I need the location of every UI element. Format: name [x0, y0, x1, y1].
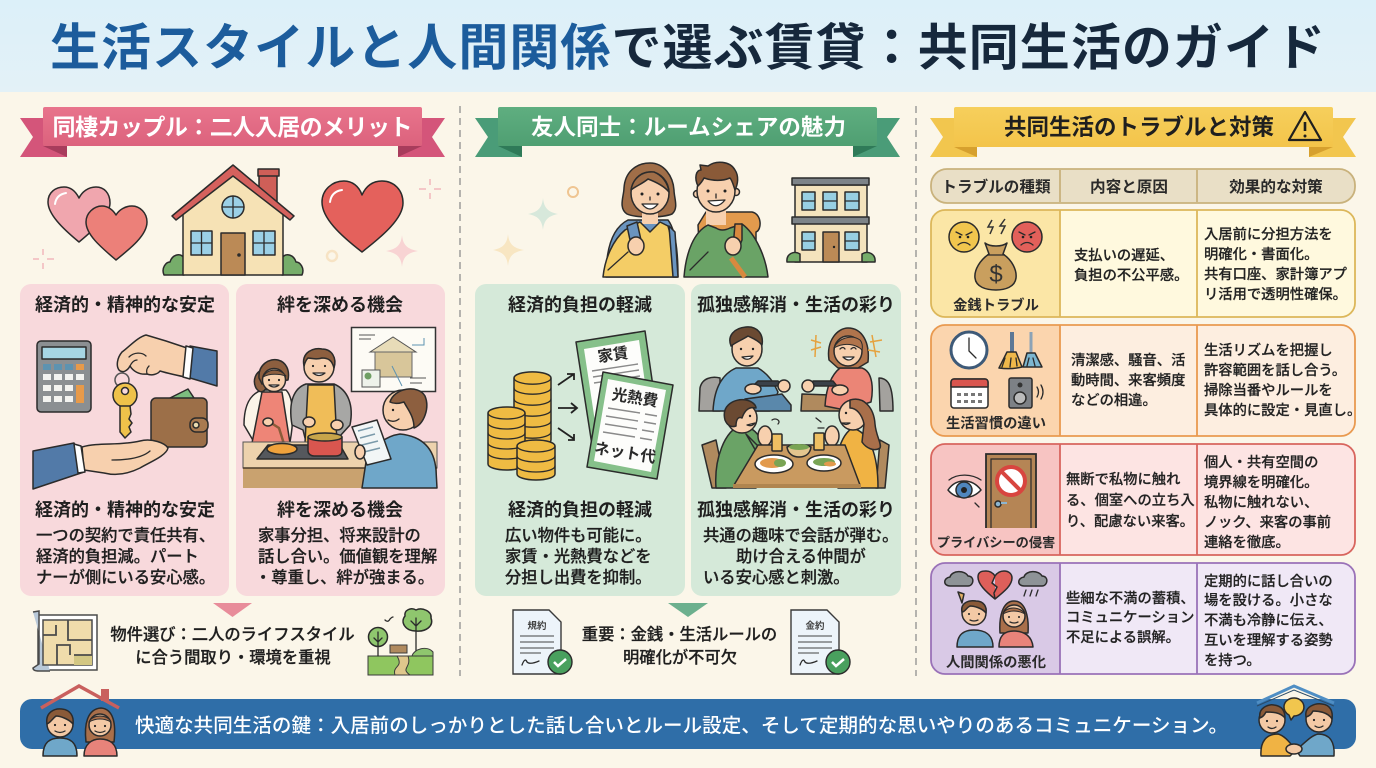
row: lifestyle difference: 生活習慣の違い — [946, 414, 1046, 432]
card heading: 経済的・精神的な安定 — [35, 295, 215, 315]
card body text: 経済的負担減。パート — [36, 548, 199, 566]
icon: contract with check — [791, 610, 850, 674]
row: money trouble: 共有口座、家計簿アプ — [1204, 265, 1348, 283]
icon: receiving hand — [33, 440, 168, 489]
icon: utility bill — [587, 372, 673, 479]
ribbon heading: friends: 友人同士：ルームシェアの魅力 — [531, 115, 846, 140]
table header: トラブルの種類 — [941, 177, 1051, 196]
row: relationship decline: 互いを理解する姿勢 — [1204, 632, 1333, 649]
row: privacy invasion — [931, 444, 1355, 555]
card: reduce financial burden — [475, 284, 685, 596]
card: deepen bonds — [236, 284, 445, 596]
row: lifestyle difference: 許容範囲を話し合う。 — [1204, 361, 1346, 379]
icon: eye — [948, 475, 981, 507]
ribbon heading: troubles — [930, 107, 1356, 157]
row: privacy invasion: プライバシーの侵害 — [937, 534, 1055, 550]
card body text: 分担し出費を抑制。 — [505, 569, 652, 587]
icon: clouds and broken heart — [945, 571, 1047, 603]
icon: wallet — [151, 389, 208, 447]
card heading repeat: 経済的・精神的な安定 — [35, 500, 215, 520]
row: lifestyle difference — [931, 325, 1361, 436]
icon: door with no-entry sign — [986, 454, 1036, 528]
row: money trouble — [931, 210, 1355, 317]
illustration: man with backpack — [684, 162, 768, 277]
row: money trouble: リ活用で透明性確保。 — [1204, 286, 1347, 303]
banner text: 快適な共同生活の鍵：入居前のしっかりとした話し合いとルール設定、そして定期的な思いやりのあるコミュニケーション。 — [135, 715, 1228, 737]
card body text: 共通の趣味で会話が弾む。 — [703, 526, 898, 545]
icon: man and woman — [957, 601, 1033, 647]
row: relationship decline: 些細な不満の蓄積、 — [1066, 590, 1195, 607]
card body text: 家事分担、将来設計の — [258, 527, 421, 545]
icon: brooms — [999, 332, 1042, 369]
illustration: friends sharing a meal — [702, 399, 889, 488]
row: money trouble: 負担の不公平感。 — [1074, 266, 1188, 284]
icon: coin stacks — [488, 372, 555, 480]
row: lifestyle difference: などの相違。 — [1071, 392, 1157, 409]
card body text: 助け合える仲間が — [736, 547, 866, 566]
icon: angry faces and money bag: $ — [989, 261, 1003, 288]
note: important rules: 明確化が不可欠 — [623, 648, 737, 667]
card: economic and mental stability — [20, 284, 229, 596]
panel: couple column — [20, 107, 445, 675]
table header: 内容と原因 — [1090, 178, 1168, 196]
row: privacy invasion: り、配慮ない来客。 — [1066, 513, 1194, 530]
icon: speaker — [1009, 378, 1043, 408]
row: relationship decline: を持つ。 — [1204, 652, 1261, 669]
row: lifestyle difference: 具体的に設定・見直し。 — [1204, 402, 1361, 419]
card heading: 経済的負担の軽減 — [508, 294, 652, 315]
row: privacy invasion: 境界線を明確化。 — [1204, 474, 1318, 491]
icon: two overlapping hearts — [48, 187, 147, 260]
row: relationship decline: 場を設ける。小さな — [1204, 592, 1333, 609]
icon: large heart — [322, 181, 403, 252]
row: privacy invasion: 個人・共有空間の — [1204, 454, 1318, 471]
card heading repeat: 経済的負担の軽減 — [508, 499, 652, 520]
row: lifestyle difference: 清潔感、騒音、活 — [1071, 351, 1185, 369]
row: relationship decline: 定期的に話し合いの — [1204, 573, 1333, 590]
title band — [0, 0, 1376, 92]
bottom banner — [20, 686, 1356, 756]
icon: calendar — [951, 379, 988, 408]
row: privacy invasion: ノック、来客の事前 — [1204, 514, 1331, 531]
illustration: woman cooking — [244, 360, 293, 444]
row: money trouble: 明確化・書面化。 — [1204, 246, 1318, 263]
ribbon heading: troubles: 共同生活のトラブルと対策 — [1004, 114, 1274, 140]
table header: 効果的な対策 — [1229, 177, 1323, 196]
icon: utility bill: 光熱費 — [611, 385, 659, 411]
card body text: 話し合い。価値観を理解 — [258, 548, 437, 566]
icon: arrows to bills — [558, 374, 577, 440]
row: lifestyle difference: 生活リズムを把握し — [1204, 341, 1333, 359]
note: important rules: 重要：金銭・生活ルールの — [582, 626, 777, 644]
icon: house — [163, 165, 303, 275]
icon: couple under roof — [41, 686, 119, 756]
card body text: 広い物件も可能に。 — [505, 527, 652, 545]
card: relieve loneliness — [691, 284, 901, 596]
card body text: ナーが側にいる安心感。 — [36, 568, 215, 587]
icon: clock — [951, 332, 987, 368]
icon: friends shaking hands — [1257, 686, 1334, 756]
icon: contract with check: 金約 — [805, 620, 825, 632]
illustration: house plan poster — [352, 328, 436, 392]
icon: apartment building — [787, 178, 875, 262]
illustration: friends playing games — [699, 327, 893, 411]
row: money trouble: 支払いの遅延、 — [1074, 247, 1174, 264]
panel: friends column — [475, 107, 901, 674]
icon: contract with check — [513, 610, 572, 674]
row: privacy invasion: 無断で私物に触れ — [1066, 471, 1180, 488]
row: relationship decline: 不足による誤解。 — [1066, 629, 1180, 646]
decoration: sparkles — [33, 179, 441, 269]
row: privacy invasion: 連絡を徹底。 — [1204, 534, 1290, 551]
illustration: man reading a plan — [352, 389, 437, 488]
ribbon heading: friends — [475, 107, 900, 157]
illustration: woman with backpack — [603, 163, 678, 277]
row: relationship decline — [931, 563, 1355, 674]
decoration: sparkles — [493, 187, 578, 266]
row: lifestyle difference: 動時間、来客頻度 — [1071, 372, 1185, 389]
ribbon heading: couple — [20, 107, 445, 157]
card body text: 一つの契約で責任共有、 — [36, 527, 215, 545]
icon: rent bill: 家賃 — [596, 344, 630, 366]
row: money trouble: 金銭トラブル — [953, 296, 1039, 314]
card body text: いる安心感と刺激。 — [703, 569, 850, 587]
arrow: pink triangle — [213, 603, 252, 617]
row: privacy invasion: 私物に触れない、 — [1204, 494, 1318, 511]
row: lifestyle difference: 掃除当番やルールを — [1204, 382, 1333, 399]
note: property selection: に合う間取り・環境を重視 — [135, 649, 331, 667]
note: property selection: 物件選び：二人のライフスタイル — [110, 626, 355, 644]
card body text: 家賃・光熱費などを — [505, 548, 652, 566]
title: 生活スタイルと人間関係で選ぶ賃貸：共同生活のガイド — [50, 20, 1325, 76]
card heading repeat: 絆を深める機会 — [277, 500, 403, 520]
icon: park with trees — [368, 609, 433, 675]
icon: rent bill — [576, 331, 660, 445]
card heading: 孤独感解消・生活の彩り — [697, 294, 895, 315]
row: money trouble: 入居前に分担方法を — [1204, 226, 1333, 243]
icon: floor plan — [33, 611, 97, 671]
row: privacy invasion: る、個室への立ち入 — [1066, 492, 1195, 509]
row: relationship decline: コミュニケーション — [1066, 609, 1194, 626]
row: relationship decline: 人間関係の悪化 — [946, 654, 1046, 671]
illustration: kitchen counter and pots — [243, 433, 437, 488]
icon: calculator — [37, 341, 91, 412]
row: relationship decline: 不満も冷静に伝え、 — [1204, 611, 1333, 629]
icon: angry faces and money bag — [949, 219, 1042, 290]
panel: troubles column — [930, 107, 1361, 674]
illustration: man cooking — [291, 349, 351, 443]
card heading: 絆を深める機会 — [277, 295, 403, 315]
icon: contract with check: 規約 — [527, 620, 547, 632]
icon: utility bill: ネット代 — [593, 439, 658, 467]
icon: hand giving key — [113, 335, 217, 438]
icon: warning triangle — [1289, 112, 1321, 140]
card heading repeat: 孤独感解消・生活の彩り — [697, 499, 895, 520]
ribbon heading: couple: 同棲カップル：二人入居のメリット — [52, 114, 412, 140]
table header — [931, 169, 1355, 203]
card body text: ・尊重し、絆が強まる。 — [255, 568, 434, 587]
arrow: green triangle — [668, 603, 708, 617]
